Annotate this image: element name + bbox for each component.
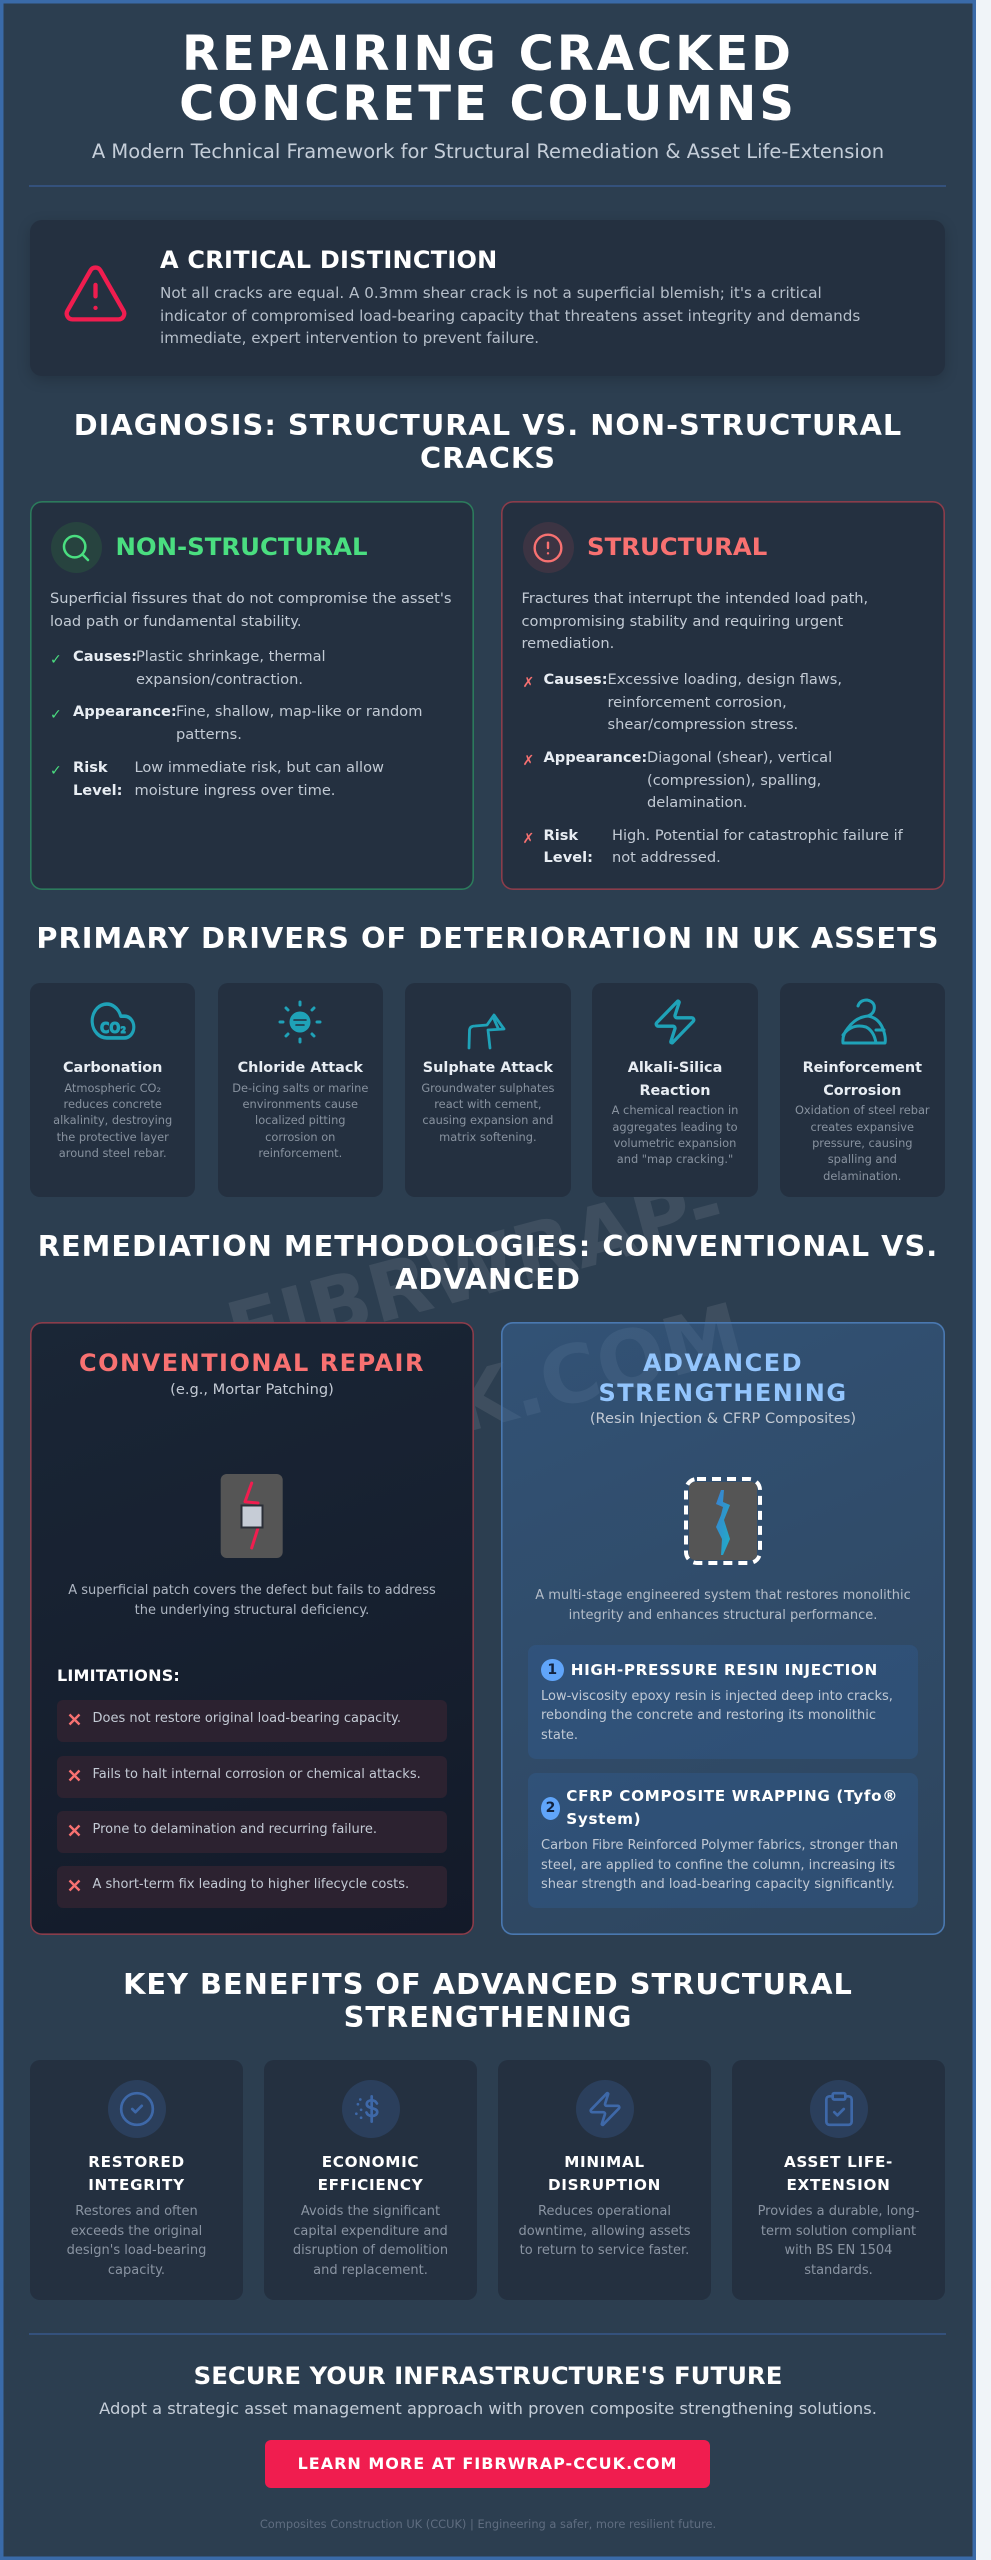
card text: De-icing salts or marine — [232, 1081, 368, 1095]
limitation item: Prone to delamination and recurring failure. — [92, 1822, 377, 1837]
icon: sulphate — [468, 1014, 506, 1050]
description: A multi-stage engineered system that restores monolithic — [535, 1588, 911, 1603]
benefit heading: RESTORED — [88, 2153, 185, 2171]
card text: matrix softening. — [439, 1130, 537, 1144]
list item: appearance — [522, 749, 832, 811]
heading: diagnosis — [74, 408, 902, 475]
list item: appearance: patterns. — [176, 726, 242, 743]
card: economic efficiency — [264, 2060, 477, 2300]
benefit text: term solution compliant — [761, 2224, 916, 2238]
benefit heading: ASSET LIFE- — [784, 2153, 893, 2171]
card text: Atmospheric CO₂ — [64, 1081, 161, 1095]
panel subheading: (Resin Injection & CFRP Composites) — [590, 1410, 856, 1427]
list item: appearance — [50, 703, 422, 743]
card: minimal disruption — [498, 2060, 711, 2300]
list item: appearance: Appearance: — [544, 749, 647, 766]
limitation item — [57, 1866, 447, 1908]
card text: Alkali-Silica — [628, 1060, 722, 1076]
heading: key benefits — [123, 1966, 853, 2034]
card text: A chemical reaction in — [612, 1103, 738, 1117]
list item: appearance: delamination. — [647, 794, 747, 811]
step number: 1 — [547, 1662, 557, 1678]
list item: risk level: Risk — [544, 826, 578, 844]
callout body: indicator of compromised load-bearing capacity that threatens asset integrity and demands — [160, 307, 860, 325]
benefit heading — [548, 2153, 661, 2194]
step number — [541, 1797, 560, 1820]
card text: corrosion on — [265, 1130, 335, 1144]
callout body — [160, 284, 860, 347]
benefit heading — [318, 2153, 423, 2194]
description — [535, 1588, 911, 1623]
heading: diagnosis: CRACKS — [420, 441, 556, 475]
illustration: wrapped column — [684, 1477, 762, 1565]
footer: Composites Construction UK (CCUK) | Engineering a safer, more resilient future. — [260, 2517, 716, 2531]
benefit text: downtime, allowing assets — [518, 2224, 691, 2238]
card text: Groundwater sulphates — [421, 1081, 554, 1095]
card text: Carbonation — [63, 1060, 162, 1076]
benefit heading: EFFICIENCY — [318, 2176, 423, 2194]
description: remediation. — [522, 635, 614, 652]
card: alkali-silica reaction — [592, 983, 758, 1197]
benefit heading: INTEGRITY — [88, 2176, 185, 2194]
benefit text: exceeds the original — [71, 2224, 202, 2238]
list item: risk level: ✗ — [522, 830, 534, 846]
benefit text: Reduces operational — [538, 2204, 671, 2219]
list item: risk level: Level: — [544, 849, 593, 866]
list item: causes: Plastic shrinkage, thermal — [136, 648, 326, 665]
description: Fractures that interrupt the intended load path, — [522, 590, 868, 607]
list item: risk level — [522, 826, 904, 866]
card text: Oxidation of steel rebar — [795, 1103, 930, 1117]
description: Superficial fissures that do not compromise the asset's — [50, 590, 451, 607]
icon: warning triangle — [64, 265, 126, 322]
limitation item — [57, 1756, 447, 1798]
title: REPAIRING CRACKED — [182, 26, 794, 82]
benefit text: with BS EN 1504 — [785, 2243, 892, 2258]
list item: causes: expansion/contraction. — [136, 671, 303, 688]
heading: primary drivers: PRIMARY DRIVERS OF DETERIORATION IN UK ASSETS — [36, 921, 940, 955]
benefit text — [293, 2204, 448, 2278]
list item: causes: ✓ — [50, 652, 62, 668]
list item: causes: ✗ — [522, 675, 534, 691]
card: restored integrity — [30, 2060, 243, 2300]
watermark: FIBRWRAP- — [217, 1158, 733, 1380]
callout heading: A CRITICAL DISTINCTION — [160, 246, 498, 274]
step text: rebonding the concrete and restoring its monolithic — [541, 1708, 876, 1723]
step heading: System) — [566, 1810, 641, 1828]
CTA text: Adopt a strategic asset management approach with proven composite strengthening solutions. — [99, 2399, 877, 2418]
limitation item — [57, 1700, 447, 1742]
list item: causes: Excessive loading, design flaws, — [608, 671, 842, 688]
benefit text: and replacement. — [313, 2262, 428, 2278]
step text — [541, 1838, 898, 1892]
limitations heading: LIMITATIONS: — [57, 1666, 180, 1685]
list item: causes — [50, 648, 326, 688]
benefit heading — [88, 2153, 185, 2194]
step number — [541, 1658, 564, 1681]
description — [68, 1583, 436, 1618]
benefit heading: DISRUPTION — [548, 2176, 661, 2194]
list item: risk level — [50, 759, 384, 799]
icon: alert circle — [522, 522, 574, 573]
step text — [541, 1688, 893, 1743]
list item: risk level: High. Potential for catastrophic failure if — [612, 826, 903, 844]
card text: the protective layer — [57, 1130, 169, 1144]
limitation item: A short-term fix leading to higher lifecycle costs. — [92, 1877, 409, 1892]
panel heading — [598, 1349, 848, 1406]
card text: localized pitting — [255, 1113, 346, 1127]
heading: diagnosis: DIAGNOSIS: STRUCTURAL VS. NON-STRUCTURAL — [74, 408, 902, 442]
card: sulphate attack — [405, 983, 571, 1197]
benefit text: to return to service faster. — [520, 2243, 689, 2258]
benefit text: capacity. — [108, 2262, 165, 2278]
card text: Reaction — [639, 1083, 710, 1099]
icon: lightning bolt — [654, 999, 696, 1045]
list item: appearance: ✗ — [522, 753, 534, 769]
description: load path or fundamental stability. — [50, 613, 301, 630]
panel: conventional repair — [30, 1322, 474, 1935]
card text: reduces concrete — [64, 1097, 162, 1111]
panel: non-structural — [30, 501, 474, 890]
benefit text — [67, 2204, 206, 2278]
panel: structural — [501, 501, 945, 890]
list item: risk level: Level: — [73, 782, 122, 799]
benefit text: disruption of demolition — [293, 2243, 448, 2258]
heading: remediation methodologies — [38, 1229, 938, 1296]
card text: delamination. — [823, 1169, 901, 1183]
title — [179, 26, 797, 132]
step heading: HIGH-PRESSURE RESIN INJECTION — [571, 1661, 878, 1679]
card text: Reinforcement — [803, 1060, 922, 1076]
icon: cloud CO2 — [90, 1002, 136, 1040]
icon: check circle — [108, 2080, 166, 2138]
icon: chloride sun — [278, 1000, 322, 1044]
limitation item: Fails to halt internal corrosion or chemical attacks. — [92, 1766, 421, 1782]
benefit text: Provides a durable, long- — [758, 2204, 919, 2219]
list item: causes: reinforcement corrosion, — [608, 694, 787, 711]
panel subheading: (e.g., Mortar Patching) — [170, 1381, 334, 1398]
icon: dollar sparks — [342, 2080, 400, 2138]
card text — [53, 1060, 172, 1160]
card text: Chloride Attack — [238, 1060, 363, 1076]
callout body: immediate, expert intervention to prevent failure. — [160, 329, 539, 347]
description: compromising stability and requiring urgent — [522, 613, 843, 630]
card text — [612, 1060, 738, 1166]
icon: corrosion dome — [841, 998, 887, 1044]
benefit heading: ECONOMIC — [322, 2153, 419, 2171]
title: CONCRETE COLUMNS — [179, 76, 797, 132]
card text — [795, 1060, 930, 1183]
panel heading: ADVANCED — [643, 1349, 803, 1377]
icon: cloud CO2: CO₂ — [100, 1020, 126, 1037]
list item: risk level: Risk — [73, 759, 108, 776]
list item: appearance: Appearance: — [73, 703, 177, 720]
list item: risk level: ✓ — [50, 763, 62, 779]
list item: risk level: not addressed. — [612, 849, 721, 866]
card text: aggregates leading to — [612, 1120, 738, 1134]
benefit heading: EXTENSION — [786, 2176, 891, 2194]
step text: steel, are applied to confine the column, increasing its — [541, 1858, 895, 1873]
icon: search — [50, 522, 102, 573]
benefit text: design's load-bearing — [67, 2243, 206, 2258]
card text: around steel rebar. — [59, 1146, 167, 1160]
list item: appearance: (compression), spalling, — [647, 772, 821, 789]
description: integrity and enhances structural performance. — [569, 1608, 877, 1623]
heading: remediation methodologies: REMEDIATION METHODOLOGIES: CONVENTIONAL VS. — [38, 1229, 938, 1263]
benefit text: capital expenditure and — [293, 2224, 448, 2238]
card text: creates expansive — [811, 1120, 914, 1134]
step text: state. — [541, 1728, 578, 1743]
heading: remediation methodologies: ADVANCED — [395, 1262, 581, 1296]
CTA heading: SECURE YOUR INFRASTRUCTURE'S FUTURE — [194, 2361, 782, 2390]
card text: pressure, causing — [812, 1136, 913, 1150]
card text: reinforcement. — [258, 1146, 342, 1160]
card: reinforcement corrosion — [780, 983, 945, 1197]
step heading — [566, 1786, 898, 1828]
watermark: CCUK.COM — [264, 1285, 753, 1500]
list item: causes: Causes: — [544, 671, 608, 688]
card text — [232, 1060, 368, 1160]
step text: shear strength and load-bearing capacity significantly. — [541, 1877, 895, 1892]
benefit text: Restores and often — [75, 2204, 198, 2219]
benefit heading — [784, 2153, 893, 2194]
card: chloride attack — [218, 983, 383, 1197]
CTA button — [265, 2440, 710, 2488]
panel heading: NON-STRUCTURAL — [116, 532, 368, 561]
step heading: CFRP COMPOSITE WRAPPING (Tyfo® — [566, 1786, 898, 1804]
card text — [421, 1060, 554, 1144]
panel: critical distinction callout — [30, 220, 945, 376]
benefit text: Avoids the significant — [301, 2204, 440, 2219]
heading: key benefits: KEY BENEFITS OF ADVANCED STRUCTURAL — [123, 1966, 853, 2000]
icon: clipboard check — [810, 2080, 868, 2138]
list item: risk level: moisture ingress over time. — [134, 782, 335, 799]
step text: Low-viscosity epoxy resin is injected deep into cracks, — [541, 1688, 893, 1704]
CTA button: LEARN MORE AT FIBRWRAP-CCUK.COM — [298, 2454, 677, 2473]
benefit text: standards. — [804, 2262, 873, 2278]
benefit text — [518, 2204, 691, 2258]
step 1: resin injection — [528, 1645, 918, 1759]
panel heading: CONVENTIONAL REPAIR — [79, 1349, 425, 1377]
card text: and "map cracking." — [617, 1152, 733, 1166]
description — [50, 590, 451, 630]
description — [522, 590, 868, 652]
card text: spalling and — [828, 1152, 897, 1166]
step text: Carbon Fibre Reinforced Polymer fabrics, stronger than — [541, 1838, 898, 1853]
list item: causes: shear/compression stress. — [608, 716, 798, 733]
card: carbonation — [30, 983, 195, 1197]
panel heading: STRENGTHENING — [598, 1378, 848, 1406]
step 2: CFRP wrapping — [528, 1772, 918, 1908]
card text: environments cause — [243, 1097, 358, 1111]
watermark — [217, 1158, 753, 1500]
card text: react with cement, — [434, 1097, 542, 1111]
heading: key benefits: STRENGTHENING — [344, 2000, 632, 2034]
panel heading: STRUCTURAL — [587, 532, 767, 561]
limitation item — [57, 1811, 447, 1853]
list item: causes — [522, 671, 842, 733]
list item: appearance: ✓ — [50, 707, 62, 723]
list item: appearance: Diagonal (shear), vertical — [647, 749, 832, 766]
card text: Corrosion — [823, 1083, 901, 1099]
card text: Sulphate Attack — [423, 1060, 553, 1076]
card: asset life-extension — [732, 2060, 945, 2300]
benefit heading: MINIMAL — [564, 2153, 645, 2171]
callout body: Not all cracks are equal. A 0.3mm shear crack is not a superficial blemish; it's a critical — [160, 284, 822, 302]
card text: alkalinity, destroying — [53, 1113, 172, 1127]
illustration: patched column — [220, 1474, 283, 1558]
description: the underlying structural deficiency. — [135, 1603, 369, 1618]
subtitle: A Modern Technical Framework for Structural Remediation & Asset Life-Extension — [92, 140, 884, 163]
card text: causing expansion and — [422, 1113, 553, 1127]
card text: volumetric expansion — [614, 1136, 736, 1150]
list item: causes: Causes: — [73, 648, 137, 665]
step number: 2 — [546, 1800, 555, 1816]
icon: bolt — [576, 2080, 634, 2138]
description: A superficial patch covers the defect but fails to address — [68, 1583, 436, 1598]
list item: risk level: Low immediate risk, but can allow — [134, 759, 384, 776]
list item: appearance: Fine, shallow, map-like or random — [176, 703, 422, 720]
benefit text — [732, 2202, 945, 2280]
limitation item: Does not restore original load-bearing capacity. — [92, 1711, 401, 1726]
panel: advanced strengthening — [501, 1322, 945, 1935]
